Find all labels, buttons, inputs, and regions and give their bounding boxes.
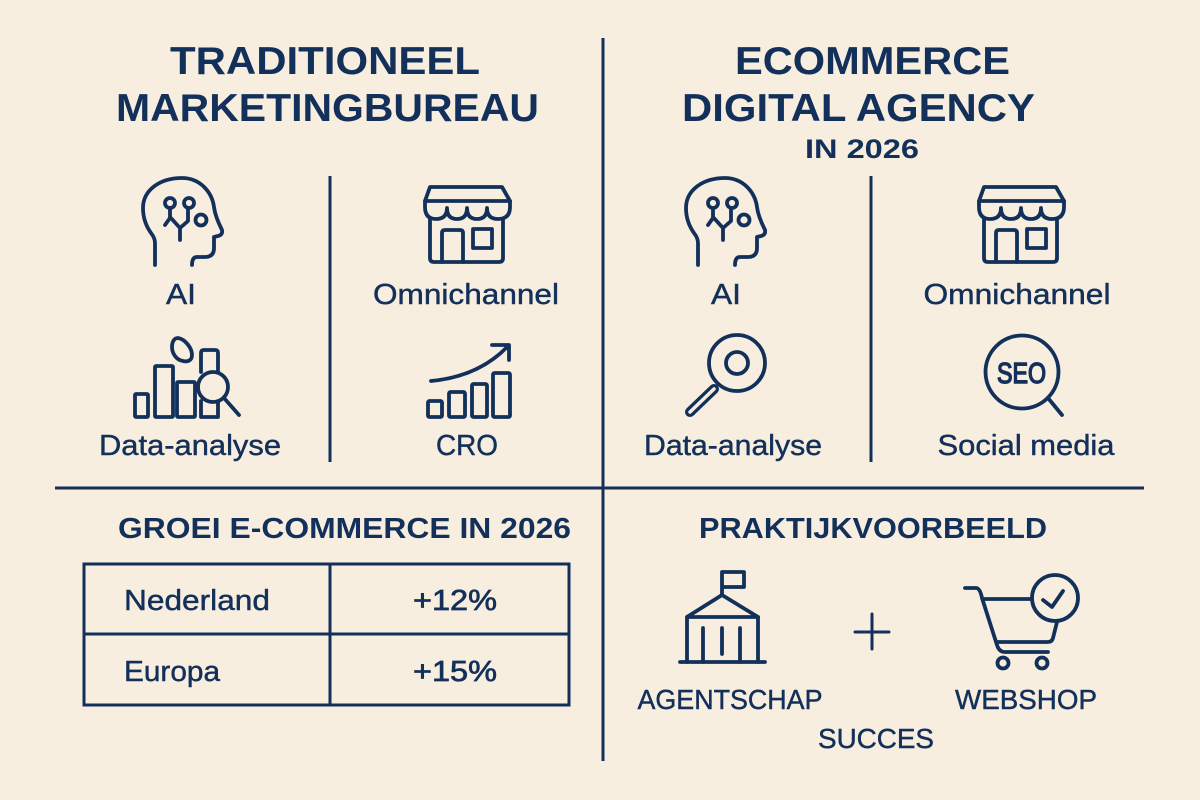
icon: AI head right <box>686 178 765 265</box>
icon: storefront right <box>979 187 1064 262</box>
icon: storefront left <box>425 187 510 262</box>
table: growth figures: +15% <box>413 656 497 688</box>
label: AI right: AI <box>711 279 741 311</box>
heading: traditioneel marketingbureau <box>116 40 539 130</box>
icon: magnifier <box>690 335 765 412</box>
icon: growth chart <box>428 345 510 417</box>
icon: plus <box>855 614 889 649</box>
label: Omnichannel right: Omnichannel <box>924 279 1110 311</box>
heading: ecommerce digital agency: DIGITAL AGENCY <box>682 87 1035 130</box>
label: Social media: Social media <box>938 430 1115 462</box>
table: growth figures: Nederland <box>124 585 270 617</box>
icon: agency building <box>680 572 765 662</box>
heading: ecommerce digital agency: ECOMMERCE <box>735 40 1010 83</box>
icon: AI head left <box>143 178 222 265</box>
label: webshop: WEBSHOP <box>955 684 1097 715</box>
icon: cart with check <box>965 575 1078 668</box>
heading: ecommerce digital agency: IN 2026 <box>805 134 919 164</box>
label: succes: SUCCES <box>818 723 934 754</box>
table: growth figures <box>84 564 569 705</box>
label: agentschap: AGENTSCHAP <box>638 684 822 715</box>
label: Data-analyse right: Data-analyse <box>644 430 822 462</box>
heading: traditioneel marketingbureau: MARKETINGBUREAU <box>116 87 539 130</box>
icon: SEO magnifier: SEO <box>997 358 1046 390</box>
label: Data-analyse left: Data-analyse <box>99 430 281 462</box>
heading: groei e-commerce: GROEI E-COMMERCE IN 2026 <box>118 513 571 545</box>
label: Omnichannel left: Omnichannel <box>373 279 559 311</box>
heading: praktijkvoorbeeld: PRAKTIJKVOORBEELD <box>699 513 1047 545</box>
table: growth figures: +12% <box>413 585 497 617</box>
label: AI left: AI <box>166 279 196 311</box>
table: growth figures: Europa <box>124 656 221 688</box>
heading: traditioneel marketingbureau: TRADITIONEEL <box>170 40 480 83</box>
label: CRO: CRO <box>436 430 498 462</box>
icon: SEO magnifier <box>986 336 1062 415</box>
heading: ecommerce digital agency <box>682 40 1035 164</box>
icon: bar chart with magnifier <box>135 338 239 417</box>
